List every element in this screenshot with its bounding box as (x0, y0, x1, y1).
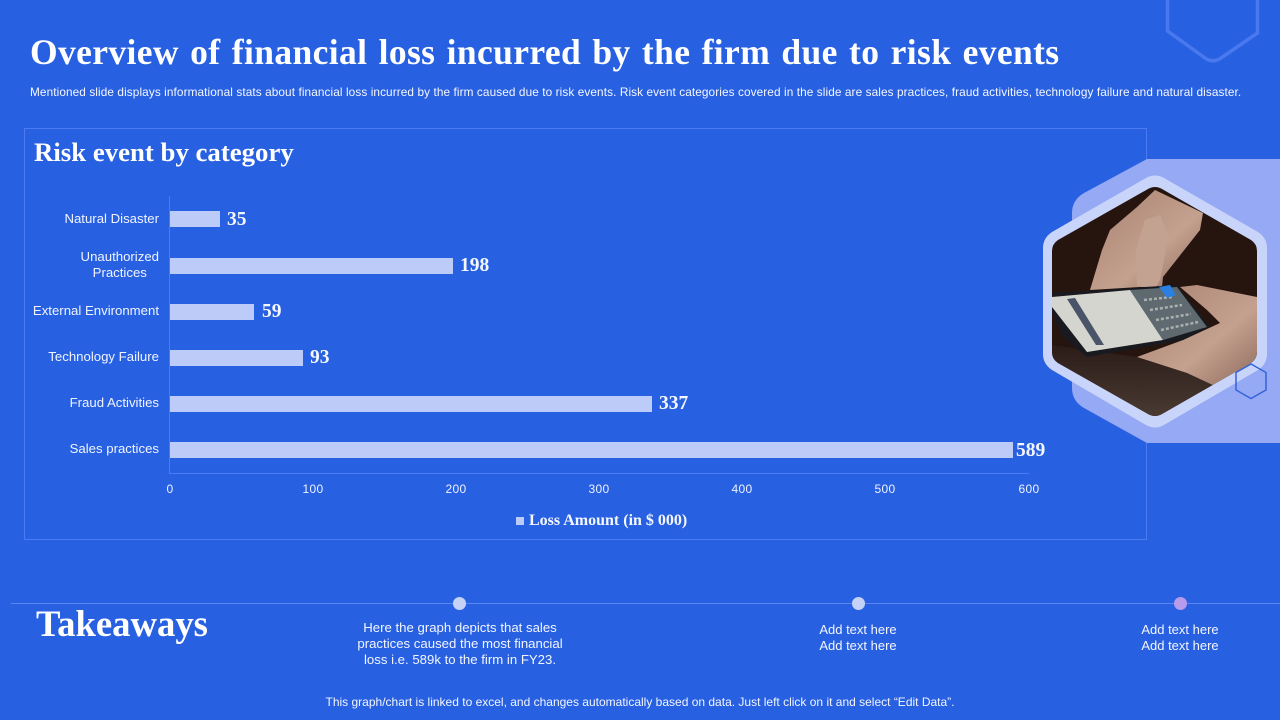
label: fraud activities: Fraud Activities (70, 395, 159, 410)
takeaway text 1: practices caused the most financial (357, 636, 563, 651)
ring (1043, 176, 1267, 428)
label: natural disaster: Natural Disaster (64, 211, 159, 226)
takeaway text 2 (819, 622, 897, 653)
value axis line (169, 473, 1029, 474)
value: 59: 59 (262, 301, 282, 322)
photo (1050, 184, 1260, 420)
bar: natural disaster (170, 211, 220, 227)
takeaways section (11, 603, 1280, 604)
bar: unauthorized practices (170, 258, 453, 274)
bar: external environment (170, 304, 254, 320)
value: 589: 589 (1016, 440, 1045, 461)
timeline rule (11, 603, 1280, 604)
footnote: This graph/chart is linked to excel, and changes automatically based on data. Just left click on it and select “Edit Data”. (326, 695, 954, 709)
tick 200: 200 (446, 482, 466, 496)
takeaway text 1 (357, 620, 563, 667)
category axis line (169, 196, 170, 474)
dot 3 (1174, 597, 1187, 610)
tick 0: 0 (166, 482, 173, 496)
takeaway text 1: Here the graph depicts that sales (363, 620, 557, 635)
value: 35: 35 (227, 209, 246, 230)
label: unauthorized practices: Practices (93, 265, 147, 280)
image: hexagon photo of hands holding a phone (1043, 159, 1280, 443)
panel border (24, 128, 1147, 540)
takeaway text 3 (1141, 622, 1219, 653)
decorative hexagon outline, top right (1166, 0, 1260, 62)
small hexagon outline (1236, 364, 1266, 398)
takeaways heading: Takeaways (36, 603, 208, 644)
subtitle: Mentioned slide displays informational stats about financial loss incurred by the firm caused due to risk events. Risk event categories covered in the slide are sales practices, fraud activities, technology failure and natural disaster. (30, 85, 1241, 99)
dot 1 (453, 597, 466, 610)
label: unauthorized practices: Unauthorized (81, 249, 159, 264)
takeaway text 2: Add text here (819, 638, 897, 653)
tick 100: 100 (303, 482, 323, 496)
tick 600: 600 (1019, 482, 1039, 496)
takeaway text 3: Add text here (1141, 622, 1219, 637)
value: 337: 337 (659, 393, 688, 414)
tick 500: 500 (875, 482, 895, 496)
label: technology failure: Technology Failure (48, 349, 159, 364)
panel: risk event chart (24, 128, 1147, 540)
bar: sales practices (170, 442, 1013, 458)
label: sales practices: Sales practices (70, 441, 159, 456)
takeaway text 1: loss i.e. 589k to the firm in FY23. (364, 652, 556, 667)
bar: fraud activities (170, 396, 652, 412)
back panel (1072, 159, 1280, 443)
label: external environment: External Environment (33, 303, 159, 318)
label: unauthorized practices (81, 249, 159, 280)
value: 93: 93 (310, 347, 330, 368)
tick 400: 400 (732, 482, 752, 496)
legend: Loss Amount (in $ 000) (529, 512, 687, 529)
chart heading: Risk event by category (34, 137, 294, 167)
title: Overview of financial loss incurred by the firm due to risk events (30, 32, 1060, 72)
takeaway text 3: Add text here (1141, 638, 1219, 653)
dot 2 (852, 597, 865, 610)
tick 300: 300 (589, 482, 609, 496)
bar: technology failure (170, 350, 303, 366)
takeaway text 2: Add text here (819, 622, 897, 637)
value: 198: 198 (460, 255, 489, 276)
